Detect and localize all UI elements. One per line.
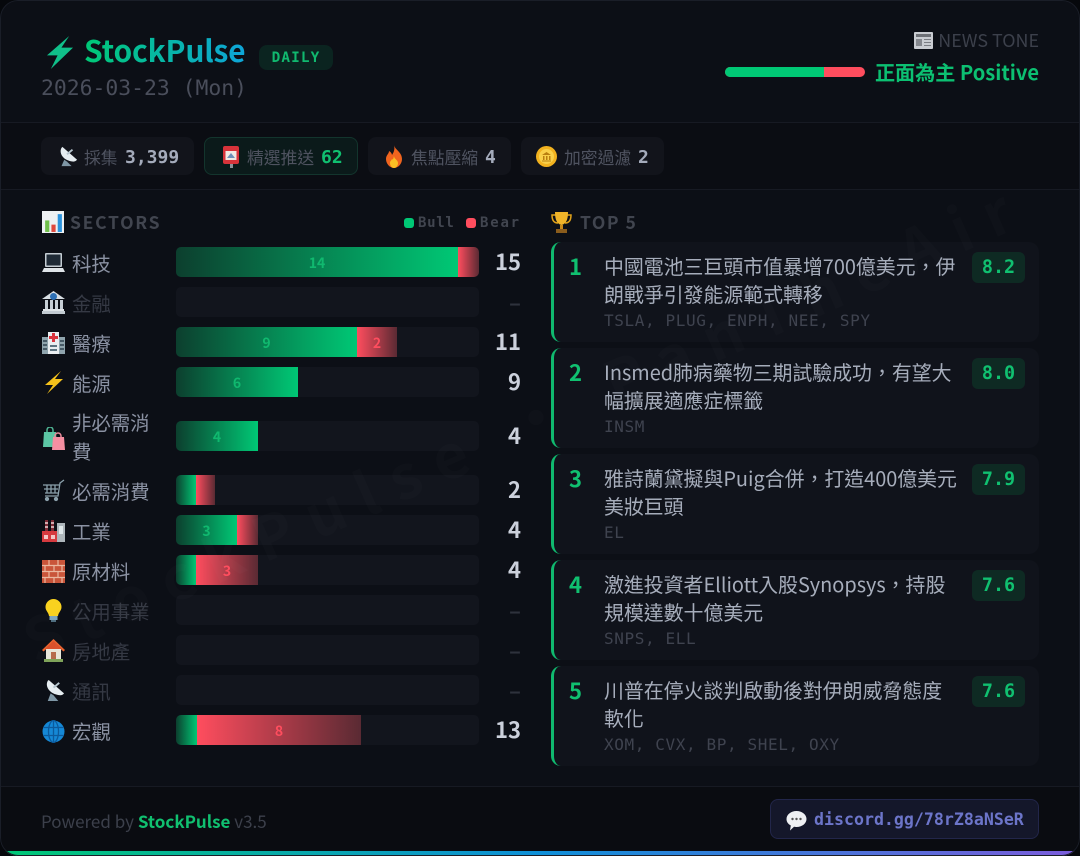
rank: 3 (569, 462, 582, 494)
bar (176, 367, 479, 397)
positive share (725, 67, 824, 77)
headline (604, 251, 955, 308)
total: 4 (508, 419, 521, 451)
stats strip (0, 123, 1080, 189)
row: macro (42, 713, 521, 745)
headline (604, 676, 964, 732)
headline: 幅擴展適應症標籤 (604, 385, 763, 414)
headline: 朗戰爭引發能源範式轉移 (604, 279, 823, 308)
score (972, 676, 1025, 707)
headline: 雅詩蘭黛擬與Puig合併，打造400億美元 (604, 463, 957, 492)
label: TOP 5 (580, 210, 637, 235)
link text: discord.gg/78rZ8aNSeR (814, 810, 1024, 829)
daily badge (259, 45, 333, 70)
rank: 2 (569, 356, 582, 388)
bar: 4 (213, 427, 221, 447)
icon: factory (42, 520, 65, 542)
icon: light bulb (46, 599, 62, 622)
headline (604, 464, 964, 520)
total: 2 (508, 473, 521, 505)
icon: trophy (551, 212, 572, 233)
headline: 激進投資者Elliott入股Synopsys，持股 (604, 569, 945, 598)
label: 宏觀 (72, 716, 111, 745)
bar (176, 675, 479, 705)
row: real estate (42, 634, 521, 666)
bar (176, 287, 479, 317)
bar (176, 421, 479, 451)
icon: globe (42, 720, 64, 743)
panel: top 5 (551, 210, 637, 235)
bear key (466, 218, 476, 228)
label: 房地產 (72, 636, 130, 665)
score: 7.9 (982, 469, 1015, 490)
label: 加密過濾 (564, 145, 631, 169)
bar (176, 715, 479, 745)
header (41, 27, 1039, 101)
headline: 軟化 (604, 703, 644, 732)
headline (604, 358, 964, 414)
chip: collected (41, 137, 194, 175)
chip: curated push (204, 137, 358, 175)
score: 7.6 (982, 575, 1015, 596)
label: 醫療 (72, 328, 111, 357)
footer (0, 787, 1080, 851)
total: – (509, 594, 521, 626)
headline: 川普在停火談判啟動後對伊朗威脅態度 (604, 675, 942, 704)
row: consumer staples (43, 473, 521, 505)
tickers: SNPS, ELL (604, 629, 696, 648)
daily badge: DAILY (272, 50, 320, 66)
icon: bar chart (42, 211, 64, 233)
score (972, 252, 1025, 283)
tickers: INSM (604, 417, 645, 436)
row: consumer discretionary (43, 407, 521, 464)
legend (404, 215, 521, 231)
icon: bricks (42, 560, 65, 583)
label: 原材料 (72, 556, 130, 585)
bar (176, 555, 479, 585)
total: 11 (495, 325, 521, 357)
bull label: Bull (418, 215, 455, 231)
headline (604, 570, 964, 626)
tone meter (725, 67, 865, 77)
bottom gradient bar (0, 851, 1080, 856)
story 5 (551, 666, 1039, 766)
bar (176, 515, 479, 545)
row: industrials (42, 513, 521, 545)
value: 62 (321, 147, 343, 168)
score: 8.2 (982, 257, 1015, 278)
rank: 4 (569, 568, 582, 600)
bar: 9 (262, 333, 271, 353)
story 3 (551, 454, 1039, 554)
label: 科技 (72, 248, 111, 277)
icon: bank (42, 291, 65, 314)
icon: mailbox (223, 146, 239, 168)
row: healthcare (42, 325, 521, 357)
bar (176, 247, 479, 277)
bull key (404, 218, 414, 228)
score (972, 464, 1025, 495)
value: 4 (485, 147, 496, 168)
tickers: TSLA, PLUG, ENPH, NEE, SPY (604, 311, 871, 330)
label: 金融 (72, 288, 111, 317)
icon: fire (386, 145, 402, 168)
headline: 美妝巨頭 (604, 491, 684, 520)
watermark: StockPulse · PanTheAir (8, 158, 1040, 681)
label: 通訊 (72, 676, 111, 705)
bar: 8 (275, 721, 283, 741)
row: materials (42, 553, 521, 585)
label: 費 (72, 436, 91, 464)
bar (176, 595, 479, 625)
row: utilities (46, 594, 521, 626)
tickers: XOM, CVX, BP, SHEL, OXY (604, 735, 840, 754)
icon: house (42, 639, 65, 662)
chip: focus compression (368, 137, 511, 175)
icon: lightning bolt (47, 36, 73, 69)
icon: laptop (42, 253, 65, 272)
tone verdict: 正面為主 Positive (875, 57, 1039, 86)
icon: newspaper (914, 32, 933, 49)
row: energy (45, 365, 521, 397)
story 1 (551, 242, 1039, 342)
icon: coin (536, 146, 557, 167)
icon: hospital (42, 332, 65, 354)
bar: 3 (223, 561, 231, 581)
bar: 3 (202, 521, 211, 541)
brand title: StockPulse (84, 27, 245, 71)
story 2 (551, 348, 1039, 448)
score: 8.0 (982, 363, 1015, 384)
score: 7.6 (982, 681, 1015, 702)
icon: satellite (46, 680, 64, 701)
label: 精選推送 (247, 145, 314, 169)
icon: speech bubble (786, 811, 807, 831)
sectors heading (42, 210, 161, 235)
row: tech (42, 245, 521, 277)
label: 必需消費 (72, 476, 150, 505)
label: 焦點壓縮 (411, 145, 478, 169)
label: 公用事業 (72, 596, 150, 625)
credit: Powered by StockPulse v3.5 (41, 808, 267, 833)
total: 4 (508, 513, 521, 545)
panel: sectors (42, 210, 521, 235)
total: – (509, 286, 521, 318)
bar (176, 475, 479, 505)
total: 15 (495, 245, 521, 277)
bar (176, 327, 479, 357)
tickers: EL (604, 523, 625, 542)
total: 9 (508, 365, 521, 397)
headline: Insmed肺病藥物三期試驗成功，有望大 (604, 357, 952, 386)
story 4 (551, 560, 1039, 660)
row: communications (46, 674, 521, 706)
bear label: Bear (480, 215, 521, 231)
bar (176, 635, 479, 665)
bar: 6 (233, 373, 241, 393)
bar: 14 (309, 253, 325, 273)
rank: 1 (569, 250, 582, 282)
news tone text: NEWS TONE (938, 27, 1039, 53)
icon: cart (43, 480, 64, 502)
news tone label (914, 27, 1039, 53)
icon: bolt (45, 371, 63, 394)
value: 2 (638, 147, 649, 168)
label (72, 407, 150, 464)
label: 工業 (72, 516, 111, 545)
total: 13 (495, 713, 521, 745)
total: – (509, 634, 521, 666)
score (972, 358, 1025, 389)
value: 3,399 (125, 147, 179, 168)
bar: 2 (373, 333, 381, 353)
row: finance (42, 286, 521, 318)
icon: satellite (60, 146, 77, 166)
total: – (509, 674, 521, 706)
label: SECTORS (70, 210, 161, 235)
total: 4 (508, 553, 521, 585)
score (972, 570, 1025, 601)
icon: shopping bags (43, 427, 65, 450)
label: 能源 (72, 368, 111, 397)
headline: 中國電池三巨頭市值暴增700億美元，伊 (604, 251, 955, 280)
date: 2026-03-23 (Mon) (41, 76, 247, 101)
chip: crypto filter (521, 137, 664, 175)
headline: 規模達數十億美元 (604, 597, 763, 626)
label: 採集 (84, 145, 118, 169)
discord link (770, 799, 1039, 839)
rank: 5 (569, 674, 582, 706)
label: 非必需消 (72, 407, 150, 436)
